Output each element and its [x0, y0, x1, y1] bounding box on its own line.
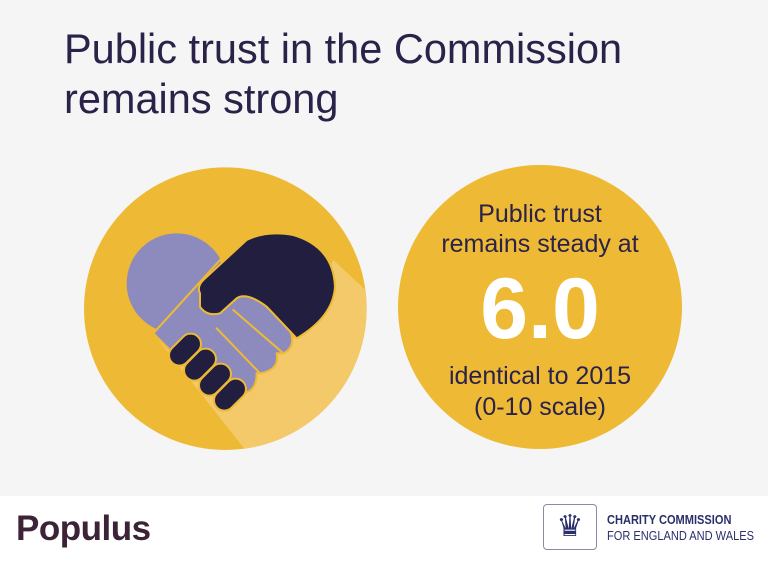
text: intro [441, 200, 639, 258]
title: remains strong [64, 75, 338, 122]
icon: handshake circle [84, 167, 367, 450]
text: commission name: CHARITY COMMISSION [607, 512, 731, 527]
footer [0, 496, 768, 563]
icon: crown [543, 504, 597, 550]
text: intro: Public trust [478, 200, 602, 228]
icon: crown: ♛ [557, 510, 583, 543]
text: comparison: identical to 2015 [449, 362, 631, 390]
title [64, 25, 622, 122]
panel: trust score circle [398, 165, 682, 449]
text: comparison: (0-10 scale) [474, 393, 606, 421]
logo: Charity Commission [543, 504, 754, 550]
text: comparison [449, 362, 631, 421]
logo: Populus: Populus [16, 509, 151, 548]
text: commission name: FOR ENGLAND AND WALES [607, 528, 754, 543]
title: Public trust in the Commission [64, 25, 622, 72]
number: 6.0: 6.0 [480, 261, 600, 357]
text: intro: remains steady at [441, 230, 639, 258]
text: commission name [607, 512, 754, 543]
